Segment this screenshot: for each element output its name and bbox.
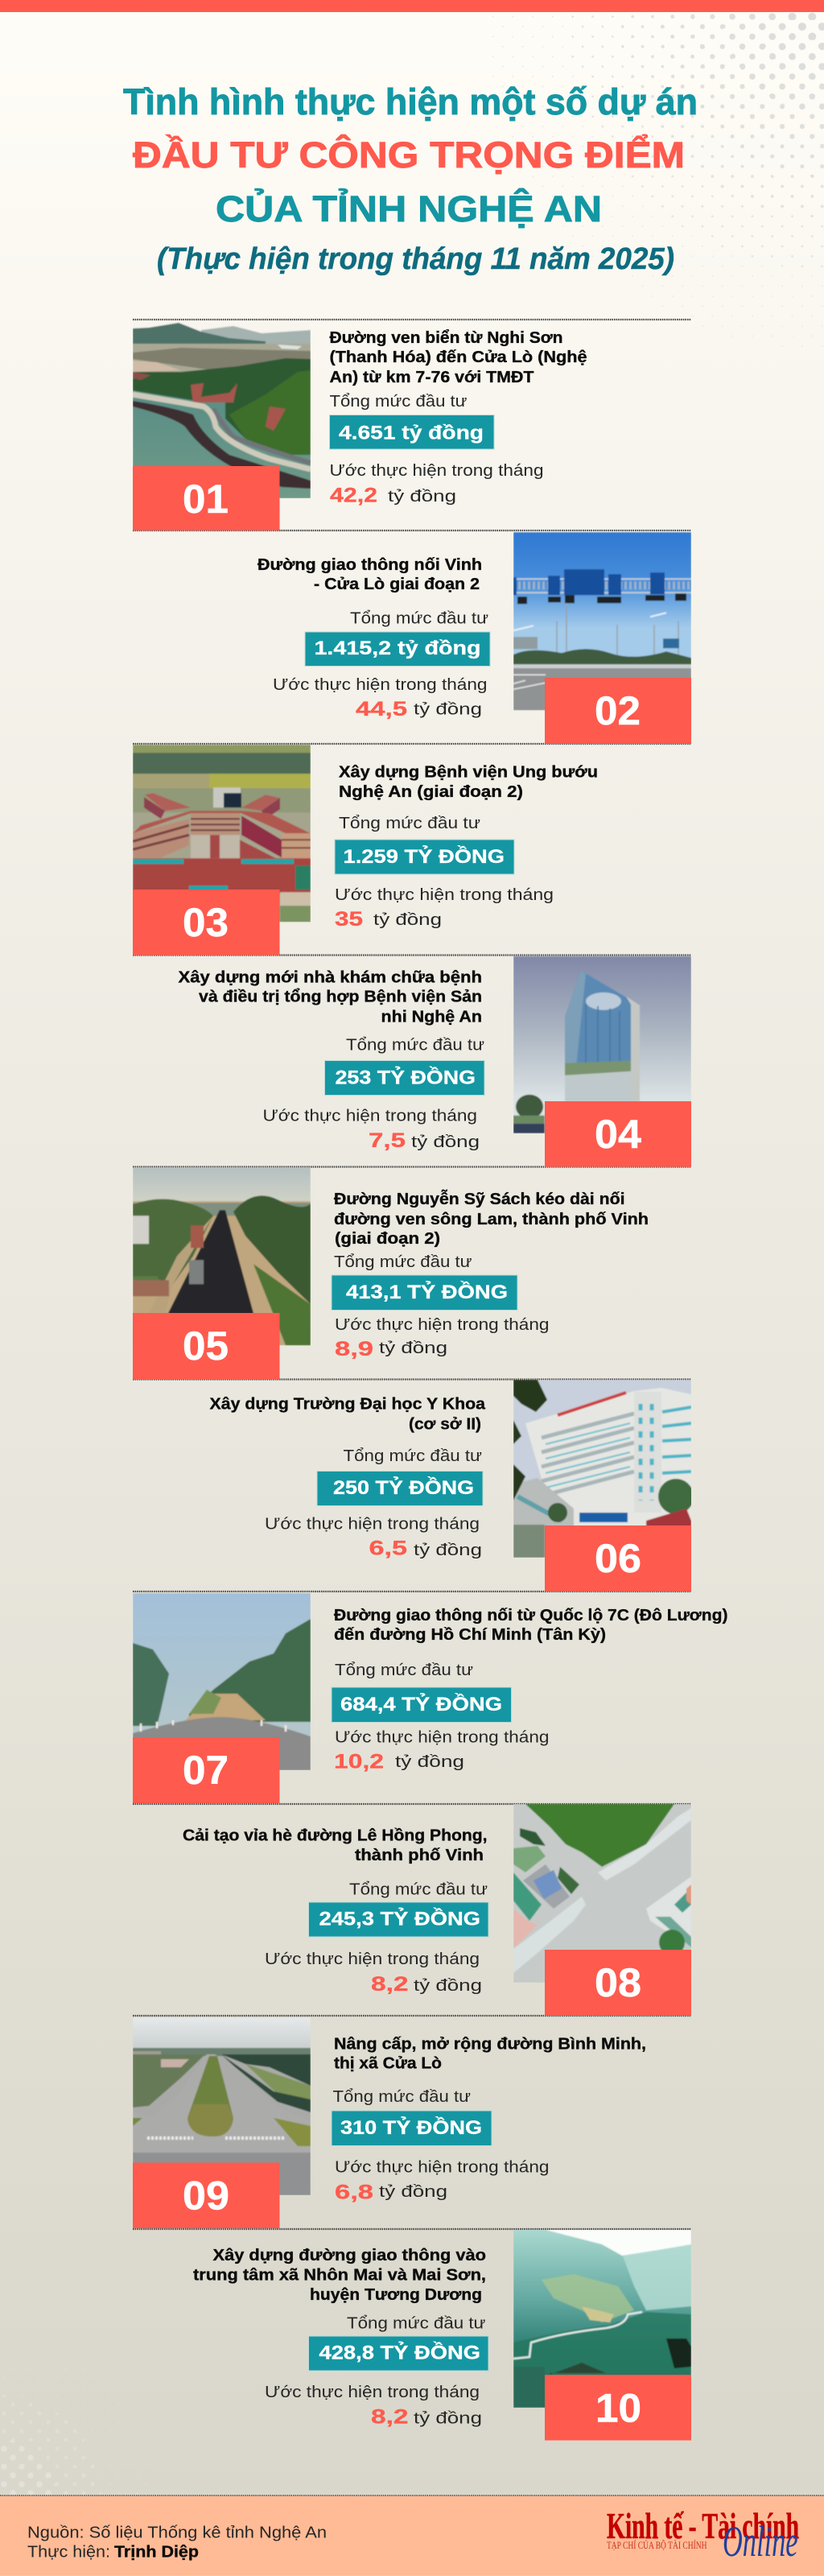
project name [330,329,587,386]
number badge 10: 10 [595,2386,641,2431]
monthly estimate value: 42,2 [330,485,377,507]
total investment value: 4.651 tỷ đồng [339,422,484,444]
monthly estimate label: Ước thực hiện trong tháng [265,1515,480,1533]
total investment label: Tổng mức đầu tư [350,610,488,628]
number badge 01 [133,466,280,530]
total investment value: 1.415,2 tỷ đồng [314,638,481,659]
project name: Cải tạo vỉa hè đường Lê Hồng Phong, [183,1827,488,1845]
number badge 02: 02 [595,688,641,733]
monthly estimate value: tỷ đồng [395,1753,464,1771]
monthly estimate label: Ước thực hiện trong tháng [335,886,554,904]
project name [334,1607,727,1644]
photo: coastal road [133,322,311,498]
panel: project 09 [133,2017,646,2228]
project name: huyện Tương Dương [310,2286,482,2304]
monthly estimate value: 7,5 [369,1129,406,1152]
monthly estimate value: 6,5 [369,1538,407,1560]
project name: Xây dựng mới nhà khám chữa bệnh [179,969,482,987]
title [123,81,698,276]
project name: Nghệ An (giai đoạn 2) [339,783,523,801]
panel: project 03 [133,745,598,955]
panel: project 06 [209,1380,694,1591]
total investment label: Tổng mức đầu tư [339,815,480,832]
panel: project 04 [179,956,691,1167]
monthly estimate value: 10,2 [334,1750,384,1773]
monthly estimate value [335,1338,447,1360]
monthly estimate value [369,1538,482,1560]
total investment value [309,1902,488,1937]
project name [183,1827,488,1864]
monthly estimate label: Ước thực hiện trong tháng [330,462,544,480]
photo: boulevard with median [133,2017,311,2195]
total investment value: 250 TỶ ĐỒNG [333,1476,474,1499]
project name: Đường giao thông nối Vinh [258,556,482,574]
number badge 06: 06 [595,1536,641,1581]
footer [0,2496,824,2575]
number badge 04 [545,1101,691,1167]
project name: Xây dựng Trường Đại học Y Khoa [209,1396,486,1414]
monthly estimate value: 8,2 [371,2405,409,2428]
project name: Đường Nguyễn Sỹ Sách kéo dài nối [334,1189,624,1208]
title: ĐẦU TƯ CÔNG TRỌNG ĐIỂM [133,134,685,175]
panel: project 10 [193,2230,691,2441]
monthly estimate value: 8,2 [371,1973,409,1996]
photo: road junction with signs [513,532,691,710]
monthly estimate value: 35 [335,908,363,931]
photo: asphalt road works [133,1167,311,1346]
monthly estimate value: 44,5 [356,698,407,720]
source and author credits: Trịnh Diệp [114,2544,199,2562]
project name: và điều trị tổng hợp Bệnh viện Sản [199,989,482,1006]
project name [339,763,598,801]
monthly estimate label: Ước thực hiện trong tháng [335,1316,549,1334]
monthly estimate value: tỷ đồng [379,1340,447,1357]
title: Tình hình thực hiện một số dự án [123,81,698,122]
project name [179,969,482,1026]
top coral bar [0,0,824,12]
number badge 06 [545,1525,691,1591]
monthly estimate value [371,2405,482,2428]
total investment value [335,840,514,874]
number badge 07 [133,1737,280,1803]
monthly estimate value: 6,8 [335,2182,373,2204]
monthly estimate label: Ước thực hiện trong tháng [335,1729,549,1747]
project name: (Thanh Hóa) đến Cửa Lò (Nghệ [330,349,587,366]
photo: medical university building [513,1380,691,1558]
publication logo: TẠP CHÍ CỦA BỘ TÀI CHÍNH [607,2539,707,2551]
number badge 09: 09 [183,2174,229,2219]
monthly estimate value: tỷ đồng [373,911,442,929]
total investment value [330,415,494,449]
number badge 05 [133,1313,280,1380]
project name: An) từ km 7-76 với TMĐT [330,369,534,386]
photo: road through forest [133,1593,311,1770]
project name: trung tâm xã Nhôn Mai và Mai Sơn, [193,2267,486,2285]
project name [334,2035,646,2072]
total investment label: Tổng mức đầu tư [333,2088,471,2106]
panel: project 02 [258,532,691,744]
number badge 02 [545,678,691,744]
number badge 08: 08 [595,1960,641,2005]
photo: oncology hospital aerial [133,745,311,923]
total investment value [325,1061,484,1095]
monthly estimate value: tỷ đồng [414,700,482,718]
number badge 03 [133,890,280,955]
panel: project 08 [183,1804,691,2016]
monthly estimate label: Ước thực hiện trong tháng [265,1951,480,1968]
monthly estimate value [371,1973,482,1996]
monthly estimate label: Ước thực hiện trong tháng [265,2384,480,2401]
project name [258,556,482,593]
total investment value: 310 TỶ ĐỒNG [340,2116,482,2139]
monthly estimate label: Ước thực hiện trong tháng [262,1108,477,1125]
monthly estimate label: Ước thực hiện trong tháng [335,2159,549,2177]
project name: Xây dựng đường giao thông vào [212,2247,486,2264]
title: CỦA TỈNH NGHỆ AN [216,188,602,229]
total investment value: 1.259 TỶ ĐỒNG [343,844,505,868]
project name [193,2247,486,2304]
project name: nhi Nghệ An [381,1008,482,1026]
project name: thị xã Cửa Lò [334,2054,442,2072]
monthly estimate value: tỷ đồng [414,1542,482,1559]
monthly estimate value: tỷ đồng [388,488,456,506]
total investment label: Tổng mức đầu tư [343,1447,482,1465]
monthly estimate value: tỷ đồng [414,1977,482,1995]
total investment label: Tổng mức đầu tư [347,2315,486,2333]
panel: project 01 [133,322,587,530]
number badge 05: 05 [183,1323,229,1368]
total investment label: Tổng mức đầu tư [346,1037,484,1055]
monthly estimate value [335,908,442,931]
total investment value [332,2111,492,2146]
monthly estimate value: 8,9 [335,1338,373,1360]
project name [209,1396,486,1433]
project name [334,1189,649,1248]
monthly estimate value: tỷ đồng [379,2183,447,2201]
monthly estimate value: tỷ đồng [411,1133,480,1151]
project name: (cơ sở II) [409,1415,481,1433]
total investment value: 413,1 TỶ ĐỒNG [346,1280,508,1303]
total investment value: 684,4 TỶ ĐỒNG [340,1692,502,1715]
total investment value: 245,3 TỶ ĐỒNG [319,1906,480,1930]
project name: Xây dựng Bệnh viện Ung bướu [339,763,598,781]
total investment label: Tổng mức đầu tư [349,1880,488,1898]
panel: project 05 [133,1167,649,1380]
total investment value [332,1687,512,1723]
photo: aerial intersection [513,1804,691,1983]
publication logo [607,2505,799,2566]
project name: đường ven sông Lam, thành phố Vinh [334,1211,649,1228]
monthly estimate value [330,485,456,507]
total investment value: 428,8 TỶ ĐỒNG [319,2341,480,2363]
source and author credits [27,2524,327,2562]
total investment value: 253 TỶ ĐỒNG [335,1066,476,1088]
project name: (giai đoạn 2) [335,1230,440,1248]
monthly estimate value [334,1750,464,1773]
total investment label: Tổng mức đầu tư [335,1662,473,1679]
title: (Thực hiện trong tháng 11 năm 2025) [157,242,674,276]
project name: đến đường Hồ Chí Minh (Tân Kỳ) [334,1626,606,1644]
total investment value [332,1275,517,1311]
total investment label: Tổng mức đầu tư [330,393,467,411]
total investment value [305,632,490,667]
photo: mountain road [513,2230,691,2408]
total investment value [317,1472,483,1505]
monthly estimate value [369,1129,480,1152]
number badge 04: 04 [595,1112,641,1157]
number badge 03: 03 [183,900,229,945]
monthly estimate value [356,698,482,720]
number badge 01: 01 [183,477,229,522]
number badge 08 [545,1950,691,2016]
total investment label: Tổng mức đầu tư [334,1253,472,1271]
project name: thành phố Vinh [355,1847,484,1864]
panel: project 07 [133,1593,727,1803]
total investment value [309,2336,488,2371]
monthly estimate value: tỷ đồng [414,2410,482,2428]
project name: Đường ven biển từ Nghi Sơn [330,329,563,347]
monthly estimate value [335,2182,447,2204]
source and author credits: Thực hiện: [27,2544,110,2562]
number badge 10 [545,2375,691,2441]
number badge 07: 07 [183,1748,229,1793]
number badge 09 [133,2162,280,2228]
photo: glass tower [513,956,691,1133]
monthly estimate label: Ước thực hiện trong tháng [273,676,488,694]
project name: - Cửa Lò giai đoạn 2 [314,576,480,593]
project name: Đường giao thông nối từ Quốc lộ 7C (Đô Lương) [334,1607,727,1624]
source and author credits: Nguồn: Số liệu Thống kê tỉnh Nghệ An [27,2524,327,2542]
project name: Nâng cấp, mở rộng đường Bình Minh, [334,2035,646,2053]
